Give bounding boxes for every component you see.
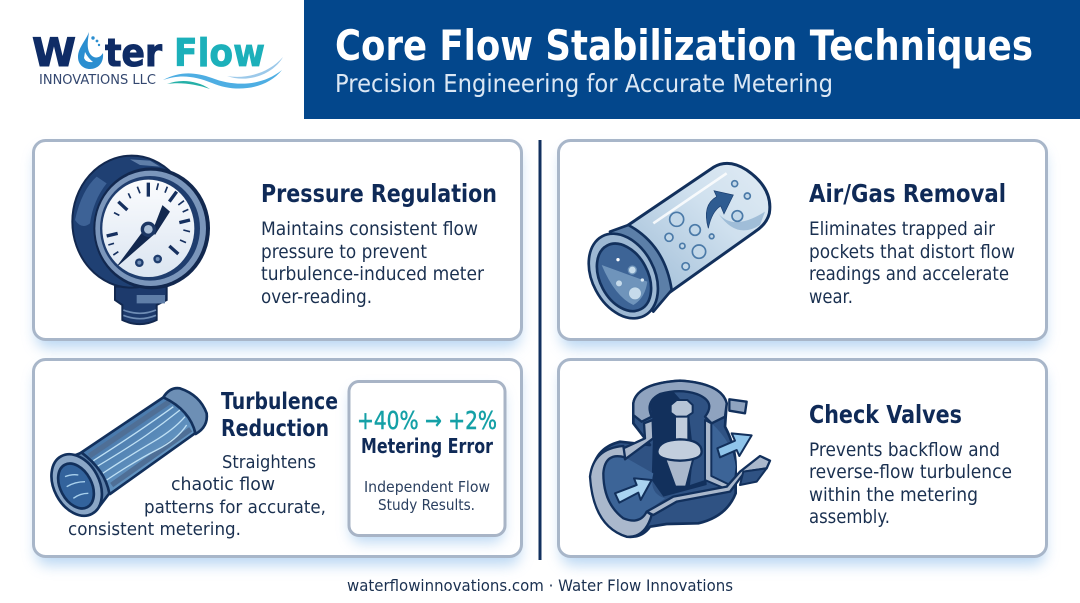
body text: turbulence-induced meter xyxy=(261,263,484,285)
center divider xyxy=(538,140,542,560)
body text xyxy=(809,439,1012,528)
heading: Turbulence xyxy=(221,389,338,415)
stat label: Metering Error xyxy=(361,434,493,458)
body text xyxy=(261,218,484,308)
logo word: W: W xyxy=(32,31,76,76)
body text: over-reading. xyxy=(261,286,372,308)
heading: Pressure Regulation xyxy=(261,179,497,208)
body text: Maintains consistent flow xyxy=(261,218,478,240)
body text: wear. xyxy=(809,286,853,308)
icon: air in pipe xyxy=(575,163,770,330)
body text: pockets that distort flow xyxy=(809,241,1015,263)
body text xyxy=(68,452,326,540)
heading: Check Valves xyxy=(809,400,962,429)
logo waves xyxy=(163,57,283,89)
stat value: +40% → +2% xyxy=(357,406,497,435)
logo subline: INNOVATIONS LLC xyxy=(39,73,156,88)
panel: pressure regulation xyxy=(34,140,522,348)
panel: turbulence reduction xyxy=(34,360,522,565)
body text: Eliminates trapped air xyxy=(809,218,995,240)
panel: check valves xyxy=(558,360,1046,565)
stat note xyxy=(364,478,490,514)
logo word: ter: ter xyxy=(105,31,162,75)
body text: assembly. xyxy=(809,506,890,528)
stat note: Independent Flow xyxy=(364,478,490,496)
callout: metering error stat xyxy=(349,382,505,542)
panel: air/gas removal xyxy=(558,140,1046,348)
body text xyxy=(809,218,1015,308)
icon: flow straightener tube xyxy=(41,388,207,524)
logo word: Flow: Flow xyxy=(174,31,265,76)
logo drop xyxy=(78,32,103,69)
heading: Reduction xyxy=(221,416,329,442)
heading: Air/Gas Removal xyxy=(809,179,1006,208)
footer: waterflowinnovations.com · Water Flow Innovations xyxy=(347,576,733,595)
subtitle: Precision Engineering for Accurate Metering xyxy=(335,69,833,98)
body text: readings and accelerate xyxy=(809,263,1009,285)
body text: within the metering xyxy=(809,484,978,506)
body text: pressure to prevent xyxy=(261,241,427,263)
heading xyxy=(221,389,338,442)
body text: Straightens xyxy=(222,452,316,473)
body text: patterns for accurate, xyxy=(144,497,326,518)
body text: consistent metering. xyxy=(68,519,241,540)
header banner xyxy=(304,0,1080,119)
icon: pressure gauge xyxy=(72,156,210,324)
icon: check valve cutaway xyxy=(590,381,770,537)
header logo area xyxy=(0,0,304,119)
body text: Prevents backflow and xyxy=(809,439,1000,461)
stat note: Study Results. xyxy=(378,496,475,514)
body text: reverse-flow turbulence xyxy=(809,461,1012,483)
body text: chaotic flow xyxy=(171,474,275,495)
